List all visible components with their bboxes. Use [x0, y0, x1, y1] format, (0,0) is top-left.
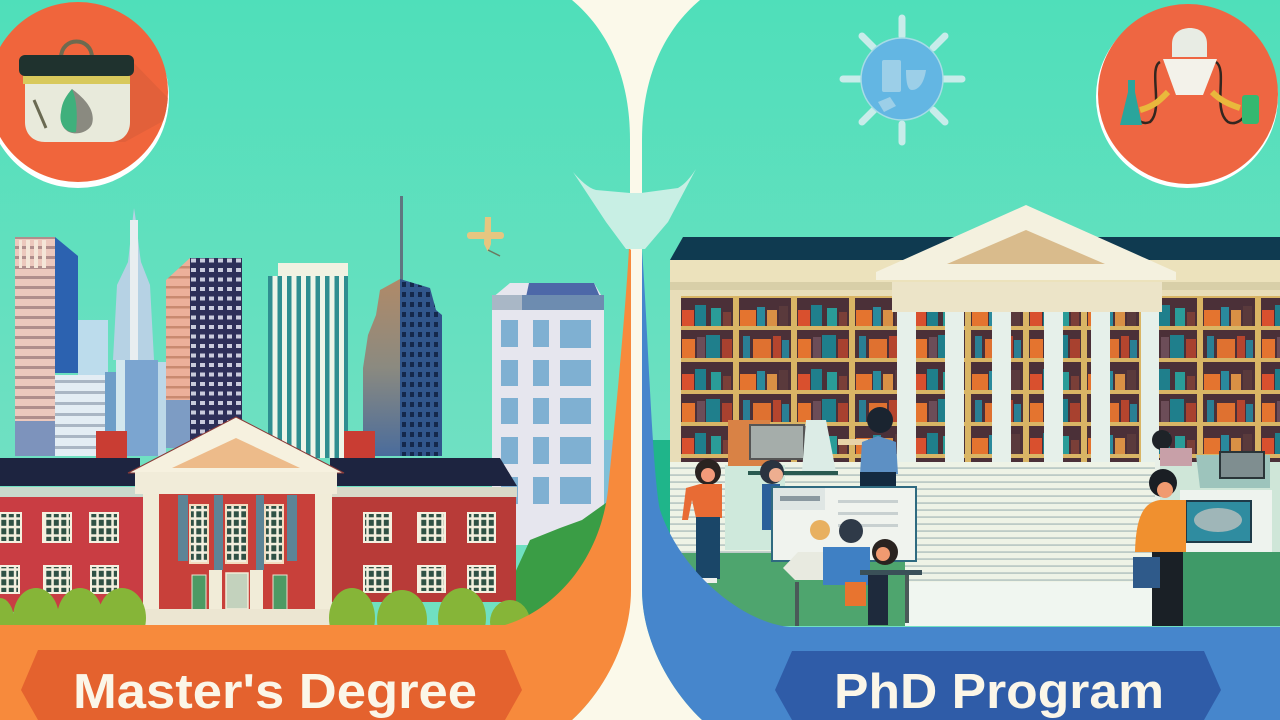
desk group	[783, 519, 922, 626]
panel: phd program	[642, 0, 1280, 720]
building: library	[660, 205, 1280, 626]
icon: airplane	[467, 217, 504, 256]
people and desks	[682, 407, 1272, 626]
shelf clutter	[728, 420, 770, 466]
connector: centre funnel	[573, 169, 696, 249]
band: blue base	[642, 250, 1280, 720]
screen: right monitor	[1180, 452, 1272, 552]
label: master's degree	[21, 650, 522, 720]
label: phd program	[775, 651, 1221, 720]
building: red brick hall	[0, 417, 517, 626]
trees	[505, 500, 610, 625]
person: right with orange sweater	[1133, 469, 1186, 626]
person: blue shirt	[838, 407, 898, 486]
skyline	[15, 196, 614, 545]
person: background right	[1152, 430, 1192, 466]
label: phd program: PhD Program	[834, 665, 1164, 719]
label: master's degree: Master's Degree	[73, 665, 477, 719]
screen: desk monitor	[748, 420, 838, 475]
person: seated	[760, 460, 784, 530]
hedges	[0, 588, 530, 650]
person: left standing	[682, 459, 722, 583]
icon: globe with rays	[843, 18, 962, 142]
band: orange base	[0, 248, 631, 720]
presentation board	[772, 487, 916, 561]
icon: basket badge	[0, 2, 170, 188]
icon: lab equipment badge	[1096, 4, 1278, 188]
panel: master's degree	[0, 0, 630, 720]
